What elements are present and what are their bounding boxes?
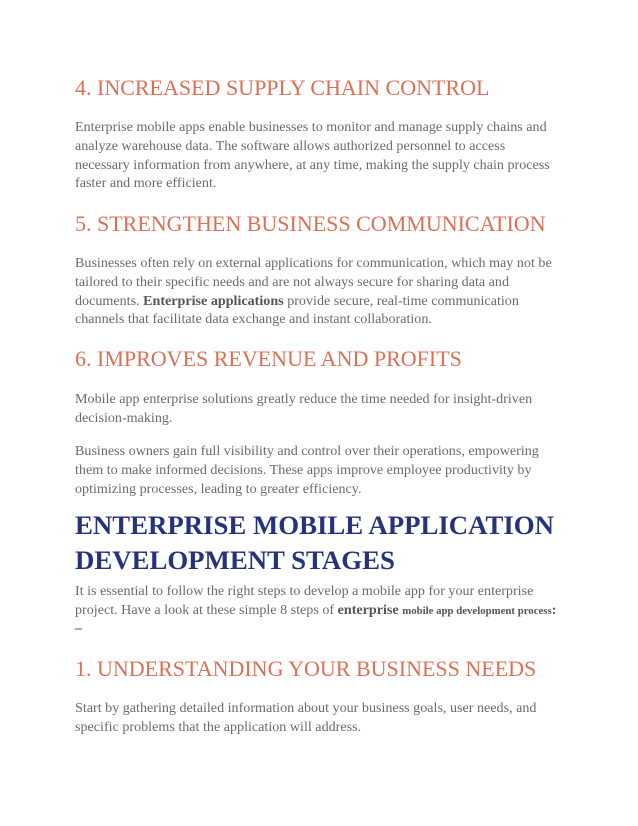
text block: business needs description: Start by gathering detailed information about your business goals, user needs, and	[75, 700, 536, 716]
text block: supply chain control description: necessary information from anywhere, at any time, making the supply chain process	[75, 157, 550, 173]
text block: stages intro: –	[75, 620, 82, 636]
text block: revenue details: them to make informed decisions. These apps improve employee productivity by	[75, 462, 532, 478]
text block: stages intro: project. Have a look at these simple 8 steps of enterprise mobile app development process:	[75, 602, 556, 618]
text block: business communication description: documents. Enterprise applications provide secure, real-time communication	[75, 293, 519, 309]
text block: revenue intro: decision-making.	[75, 410, 172, 426]
text block: business communication description: Businesses often rely on external applications for communication, which may not be	[75, 255, 552, 271]
text block: revenue details: Business owners gain full visibility and control over their operations, empowering	[75, 443, 539, 459]
text block: revenue details	[75, 443, 539, 497]
heading: increased supply chain control: 4. INCREASED SUPPLY CHAIN CONTROL	[75, 75, 489, 100]
heading: improves revenue and profits: 6. IMPROVES REVENUE AND PROFITS	[75, 346, 462, 371]
title: enterprise mobile application development stages	[75, 510, 554, 575]
text block: stages intro: It is essential to follow the right steps to develop a mobile app for your enterprise	[75, 583, 533, 599]
title: enterprise mobile application development stages: ENTERPRISE MOBILE APPLICATION	[75, 510, 554, 540]
text block: supply chain control description: Enterprise mobile apps enable businesses to monitor and manage supply chains and	[75, 119, 547, 135]
heading: understanding your business needs: 1. UNDERSTANDING YOUR BUSINESS NEEDS	[75, 656, 536, 681]
text block: revenue details: optimizing processes, leading to greater efficiency.	[75, 481, 361, 497]
text block: supply chain control description: analyze warehouse data. The software allows authorized personnel to access	[75, 138, 505, 154]
text block: business needs description	[75, 700, 536, 735]
text block: stages intro	[74, 583, 556, 636]
text block: business communication description: tailored to their specific needs and are not always secure for sharing data and	[75, 274, 509, 290]
text block: supply chain control description	[75, 119, 550, 191]
heading: strengthen business communication: 5. STRENGTHEN BUSINESS COMMUNICATION	[75, 211, 546, 236]
text block: business communication description: channels that facilitate data exchange and instant collaboration.	[75, 311, 432, 327]
text block: supply chain control description: faster and more efficient.	[75, 175, 216, 191]
text block: revenue intro: Mobile app enterprise solutions greatly reduce the time needed for insight-driven	[75, 391, 532, 407]
text block: business communication description	[75, 255, 552, 327]
text block: business needs description: specific problems that the application will address.	[75, 719, 361, 735]
title: enterprise mobile application development stages: DEVELOPMENT STAGES	[75, 545, 395, 575]
text block: revenue intro	[75, 391, 532, 426]
